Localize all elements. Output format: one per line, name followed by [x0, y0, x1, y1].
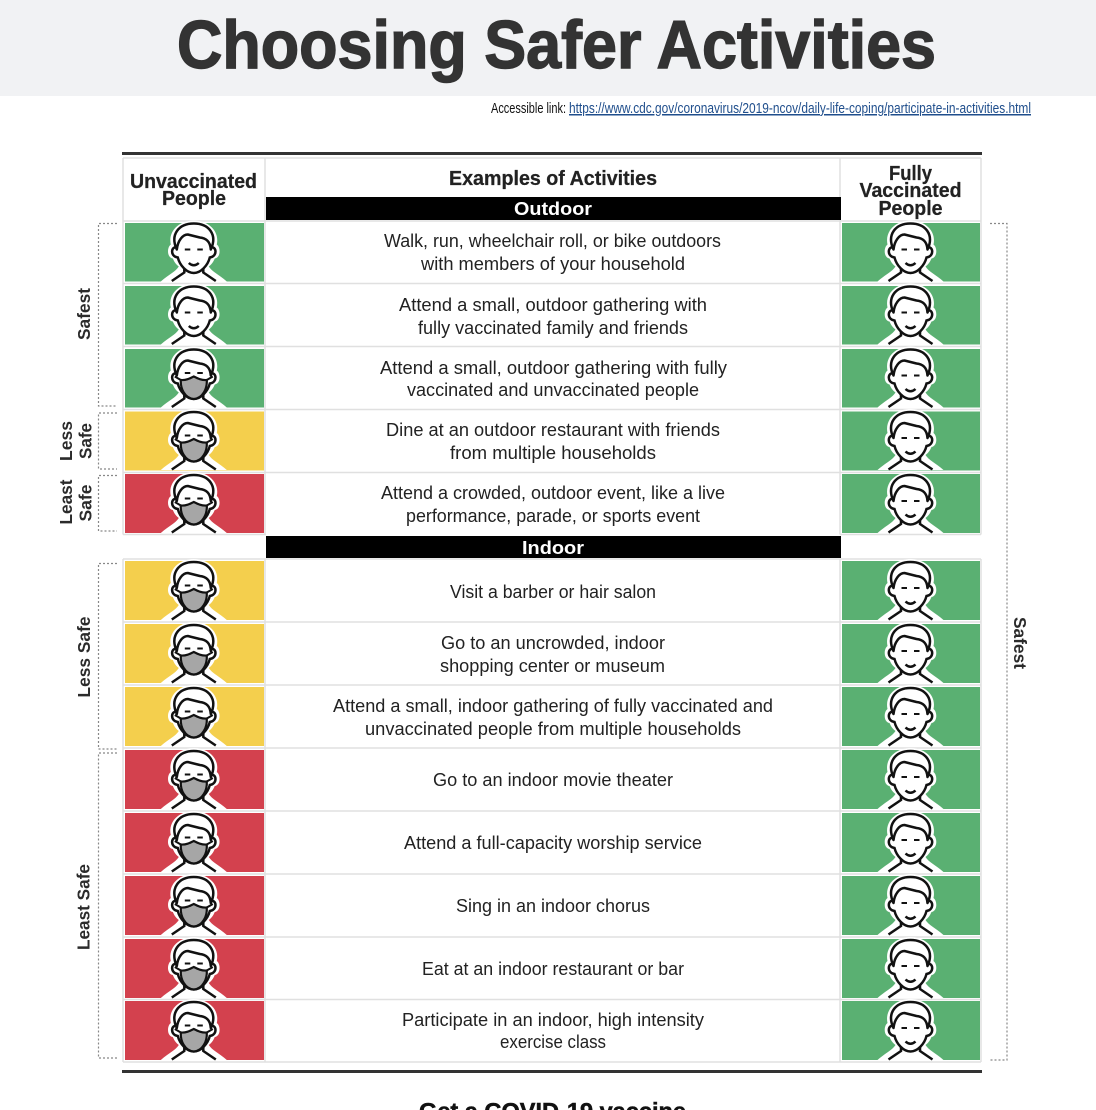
section bar: outdoor: Outdoor [514, 199, 592, 219]
risk label: indoor less safe: Less Safe [74, 616, 94, 698]
row: small indoor gathering [125, 685, 980, 746]
row: shopping center or museum: shopping center or museum [440, 655, 665, 676]
row: small outdoor gathering vaccinated [125, 284, 980, 344]
row: small outdoor gathering mixed: vaccinated and unvaccinated people [407, 379, 699, 400]
row: walk, run, roll or bike [125, 220, 980, 282]
section bar: outdoor [266, 197, 841, 220]
row: small outdoor gathering vaccinated: Attend a small, outdoor gathering with [399, 294, 707, 315]
row: barber or salon: Visit a barber or hair salon [450, 581, 656, 602]
risk label: outdoor least safe: Least [56, 479, 76, 524]
header: unvaccinated people [130, 171, 257, 210]
risk label: indoor less safe [74, 564, 117, 749]
title banner: Choosing Safer Activities [177, 7, 936, 83]
risk label: outdoor least safe: Safe [76, 484, 96, 522]
header: fully vaccinated people: Vaccinated [860, 180, 962, 202]
row: small indoor gathering: Attend a small, indoor gathering of fully vaccinated and [333, 695, 773, 716]
row: exercise class [125, 999, 980, 1060]
row: small outdoor gathering mixed: Attend a small, outdoor gathering with fully [380, 357, 728, 378]
row: outdoor restaurant [125, 409, 980, 470]
row: walk, run, roll or bike: Walk, run, wheelchair roll, or bike outdoors [384, 230, 721, 251]
header: fully vaccinated people: Fully [889, 163, 933, 185]
row: exercise class: Participate in an indoor, high intensity [402, 1009, 705, 1030]
row: indoor chorus [125, 874, 980, 935]
row: outdoor restaurant: Dine at an outdoor restaurant with friends [386, 419, 720, 440]
accessible link: Accessible link: [491, 100, 566, 117]
risk label: outdoor safest: Safest [74, 288, 94, 340]
row: shopping center or museum: Go to an uncrowded, indoor [441, 632, 665, 653]
risk label: indoor least safe: Least Safe [74, 864, 94, 950]
row: small outdoor gathering mixed [125, 346, 980, 408]
risk label: vaccinated safest: Safest [1010, 617, 1030, 669]
row: walk, run, roll or bike: with members of your household [420, 253, 685, 274]
row: shopping center or museum [125, 622, 980, 683]
risk label: outdoor less safe: Less [56, 421, 76, 461]
row: outdoor restaurant: from multiple households [450, 442, 656, 463]
risk label: outdoor less safe [56, 413, 117, 469]
row: worship service: Attend a full-capacity worship service [404, 832, 702, 853]
row: worship service [125, 811, 980, 872]
title banner [0, 0, 1096, 96]
row: exercise class: exercise class [500, 1031, 606, 1052]
row: restaurant or bar: Eat at an indoor restaurant or bar [422, 958, 684, 979]
section bar: indoor [266, 536, 841, 558]
row: small indoor gathering: unvaccinated people from multiple households [365, 718, 741, 739]
row: crowded outdoor event: Attend a crowded, outdoor event, like a live [381, 482, 725, 503]
risk label: outdoor less safe: Safe [76, 423, 96, 459]
header: fully vaccinated people: People [878, 198, 942, 220]
risk label: outdoor safest [74, 224, 117, 406]
row: restaurant or bar [125, 937, 980, 998]
row: crowded outdoor event: performance, parade, or sports event [406, 505, 700, 526]
row: barber or salon [125, 559, 980, 620]
table rules [122, 152, 982, 1073]
row: crowded outdoor event [125, 472, 980, 533]
header: unvaccinated people: Unvaccinated [130, 171, 257, 193]
header: fully vaccinated people [860, 163, 962, 220]
row: movie theater: Go to an indoor movie theater [433, 769, 673, 790]
row: indoor chorus: Sing in an indoor chorus [456, 895, 650, 916]
risk label: indoor least safe [74, 753, 117, 1058]
risk label: outdoor least safe [56, 476, 117, 531]
risk label: vaccinated safest [990, 224, 1030, 1060]
row: movie theater [125, 748, 980, 809]
header: examples of activities: Examples of Activities [449, 168, 657, 190]
header: unvaccinated people: People [162, 188, 226, 210]
section bar: indoor: Indoor [522, 538, 584, 558]
row: small outdoor gathering vaccinated: fully vaccinated family and friends [418, 317, 688, 338]
